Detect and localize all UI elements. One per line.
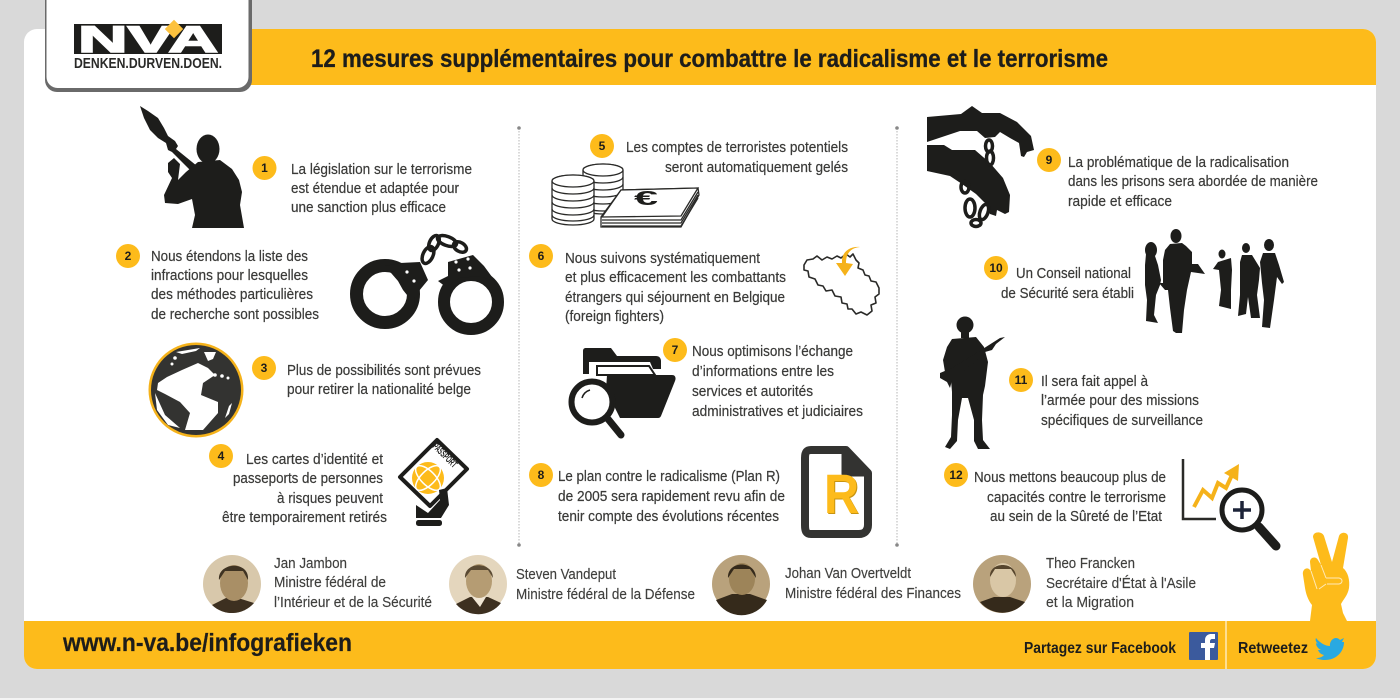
name and role: Ministre fédéral des Finances — [785, 585, 961, 602]
badge 6 — [529, 244, 553, 268]
retweet — [1238, 638, 1344, 660]
text 8: Le plan contre le radicalisme (Plan R) — [558, 468, 780, 485]
name and role: Theo Francken — [1046, 555, 1135, 572]
measure 10 — [984, 229, 1284, 333]
text 7: services et autorités — [692, 383, 813, 400]
name and role: Steven Vandeput — [516, 566, 617, 583]
icon: passport in hand — [400, 440, 467, 526]
logo slogan: DENKEN.DURVEN.DOEN. — [74, 55, 222, 72]
website url: www.n-va.be/infografieken — [62, 629, 352, 657]
icon: passport in hand: PASSPORT — [430, 441, 459, 470]
text 8: de 2005 sera rapidement revu afin de — [558, 488, 785, 505]
text 7: Nous optimisons l’échange — [692, 343, 853, 360]
measure 1 — [140, 106, 472, 228]
text 5 — [626, 139, 848, 176]
name and role — [1046, 555, 1196, 611]
text 3: pour retirer la nationalité belge — [287, 381, 471, 398]
text 6: et plus efficacement les combattants — [565, 269, 786, 286]
text 9: La problématique de la radicalisation — [1068, 154, 1289, 171]
text 1: La législation sur le terrorisme — [291, 161, 472, 178]
icon: Facebook — [1189, 632, 1218, 660]
icon: plan R document: R — [824, 462, 859, 525]
footer bar — [24, 621, 1376, 669]
badge 4: 4 — [218, 449, 225, 463]
text 4: passeports de personnes — [233, 470, 383, 487]
measure 11 — [940, 316, 1203, 449]
text 7: administratives et judiciaires — [692, 403, 863, 420]
logo mark — [74, 19, 222, 60]
measure 8 — [529, 450, 868, 534]
text 10: Un Conseil national — [1016, 265, 1131, 282]
name and role: Ministre fédéral de — [274, 574, 386, 591]
name and role: Secrétaire d'État à l'Asile — [1046, 575, 1196, 592]
text 9: dans les prisons sera abordée de manière — [1068, 173, 1318, 190]
retweet: Retweetez — [1238, 640, 1308, 657]
text 2: de recherche sont possibles — [151, 306, 319, 323]
text 12 — [974, 469, 1166, 525]
portrait — [449, 555, 507, 614]
icon: coins and banknotes — [552, 164, 699, 227]
text 11: l’armée pour des missions — [1041, 392, 1199, 409]
name and role: Ministre fédéral de la Défense — [516, 586, 695, 603]
text 1 — [291, 161, 472, 216]
badge 7: 7 — [672, 343, 679, 357]
text 11: Il sera fait appel à — [1041, 373, 1149, 390]
logo card — [45, 0, 252, 92]
badge 7 — [663, 338, 687, 362]
text 6: étrangers qui séjournent en Belgique — [565, 289, 785, 306]
text 12: Nous mettons beaucoup plus de — [974, 469, 1166, 486]
badge 8: 8 — [538, 468, 545, 482]
badge 1 — [252, 156, 276, 180]
icon: globe — [148, 342, 244, 438]
badge 3 — [252, 356, 276, 380]
name and role — [785, 565, 961, 602]
measure 3 — [148, 342, 481, 438]
measure 7 — [572, 338, 863, 435]
text 5: Les comptes de terroristes potentiels — [626, 139, 848, 156]
share on Facebook — [1024, 632, 1218, 660]
text 4: Les cartes d’identité et — [246, 451, 384, 468]
icon: group of people — [1145, 229, 1284, 333]
badge 1: 1 — [261, 161, 268, 175]
measure 9 — [927, 106, 1318, 226]
badge 5: 5 — [599, 139, 606, 153]
portrait — [203, 555, 261, 613]
badge 4 — [209, 444, 233, 468]
column dividers — [517, 126, 899, 547]
share on Facebook: Partagez sur Facebook — [1024, 640, 1176, 657]
text 1: une sanction plus efficace — [291, 199, 446, 216]
text 5: seront automatiquement gelés — [665, 159, 848, 176]
icon: plan R document — [805, 450, 868, 534]
text 6: Nous suivons systématiquement — [565, 250, 761, 267]
text 7: d’informations entre les — [692, 363, 834, 380]
minister: Steven Vandeput — [449, 555, 695, 614]
minister: Theo Francken — [973, 555, 1196, 613]
text 1: est étendue et adaptée pour — [291, 180, 459, 197]
icon: fighter with rocket launcher — [140, 106, 244, 228]
badge 11 — [1009, 368, 1033, 392]
text 9 — [1068, 154, 1318, 210]
text 11 — [1041, 373, 1203, 429]
name and role: l’Intérieur et de la Sécurité — [274, 594, 432, 611]
name and role — [274, 555, 432, 611]
name and role — [516, 566, 695, 603]
badge 6: 6 — [538, 249, 545, 263]
text 3 — [287, 362, 481, 398]
measure 2 — [116, 233, 498, 329]
badge 10 — [984, 256, 1008, 280]
text 2 — [151, 248, 319, 323]
text 8: tenir compte des évolutions récentes — [558, 508, 779, 525]
measure 6 — [529, 244, 879, 325]
badge 12 — [944, 463, 968, 487]
icon: plan R document: R — [825, 463, 860, 526]
badge 5 — [590, 134, 614, 158]
icon: victory hand — [1303, 532, 1349, 621]
badge 2 — [116, 244, 140, 268]
text 2: infractions pour lesquelles — [151, 267, 308, 284]
text 6 — [565, 250, 786, 325]
text 12: au sein de la Sûreté de l’Etat — [990, 508, 1163, 525]
text 3: Plus de possibilités sont prévues — [287, 362, 481, 379]
icon: soldier — [940, 316, 1005, 449]
text 4 — [222, 451, 387, 526]
text 4: être temporairement retirés — [222, 509, 387, 526]
badge 3: 3 — [261, 361, 268, 375]
badge 2: 2 — [125, 249, 132, 263]
text 9: rapide et efficace — [1068, 193, 1172, 210]
icon: Twitter bird — [1316, 638, 1344, 660]
name and role: Johan Van Overtveldt — [785, 565, 912, 582]
badge 8 — [529, 463, 553, 487]
text 2: Nous étendons la liste des — [151, 248, 308, 265]
minister: Johan Van Overtveldt — [712, 555, 961, 615]
measure 5 — [552, 134, 848, 227]
title: 12 mesures supplémentaires pour combattre le radicalisme et le terrorisme — [311, 45, 1108, 73]
name and role: et la Migration — [1046, 594, 1134, 611]
text 7 — [692, 343, 863, 420]
portrait — [973, 555, 1031, 613]
logo mark: NVA — [78, 19, 218, 60]
text 12: capacités contre le terrorisme — [987, 489, 1166, 506]
text 4: à risques peuvent — [277, 490, 384, 507]
name and role: Jan Jambon — [274, 555, 347, 572]
icon: rising chart and magnifier — [1183, 459, 1276, 546]
icon: folder and magnifier — [572, 348, 676, 435]
portrait — [712, 555, 770, 615]
measure 4 — [209, 440, 467, 526]
badge 9 — [1037, 148, 1061, 172]
measure 12 — [944, 459, 1276, 546]
badge 9: 9 — [1046, 153, 1053, 167]
badge 10: 10 — [989, 261, 1003, 275]
minister: Jan Jambon — [203, 555, 432, 613]
text 8 — [558, 468, 785, 525]
badge 12: 12 — [949, 468, 963, 482]
icon: map of Belgium with arrow — [804, 247, 879, 315]
badge 11: 11 — [1015, 373, 1028, 387]
header banner — [240, 29, 1376, 85]
icon: coins and banknotes: € — [634, 188, 658, 210]
text 10 — [1001, 265, 1134, 302]
icon: handcuffs — [356, 233, 498, 329]
text 11: spécifiques de surveillance — [1041, 412, 1203, 429]
text 2: des méthodes particulières — [151, 286, 313, 303]
text 10: de Sécurité sera établi — [1001, 285, 1134, 302]
text 6: (foreign fighters) — [565, 308, 664, 325]
icon: chained hands — [927, 106, 1034, 226]
